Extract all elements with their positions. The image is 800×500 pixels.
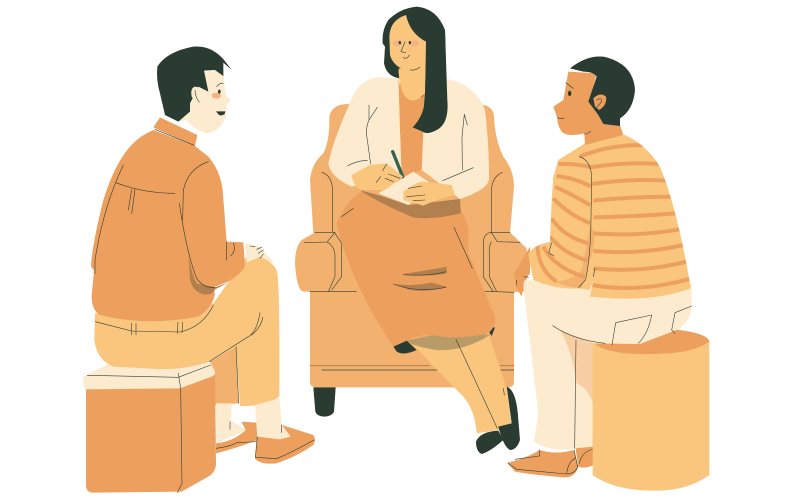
hand on knee	[245, 243, 275, 263]
figure: therapist in armchair	[295, 7, 527, 454]
skirt	[337, 191, 495, 347]
head and hair	[383, 7, 448, 133]
cardigan and dress top	[328, 77, 489, 199]
far shoe	[575, 445, 595, 468]
armchair	[295, 104, 527, 417]
cube stool	[83, 362, 216, 493]
head and hair	[157, 47, 232, 133]
near shoe	[507, 450, 578, 477]
illustration: three people in a counselling conversation	[83, 6, 710, 493]
figure: man on the right seated on a cylinder	[507, 56, 709, 491]
cylinder stool	[553, 306, 709, 491]
head and hair	[553, 56, 635, 145]
crossed legs and shoes	[393, 327, 520, 454]
trousers	[523, 280, 692, 450]
striped sweater	[528, 135, 692, 299]
notepad, pen and hands	[352, 152, 455, 206]
figure: man on the left seated on a cube	[83, 47, 315, 493]
jacket	[91, 117, 245, 321]
near leg and trousers	[94, 256, 315, 464]
hand	[514, 247, 530, 297]
far leg, sock and shoe	[210, 347, 257, 453]
